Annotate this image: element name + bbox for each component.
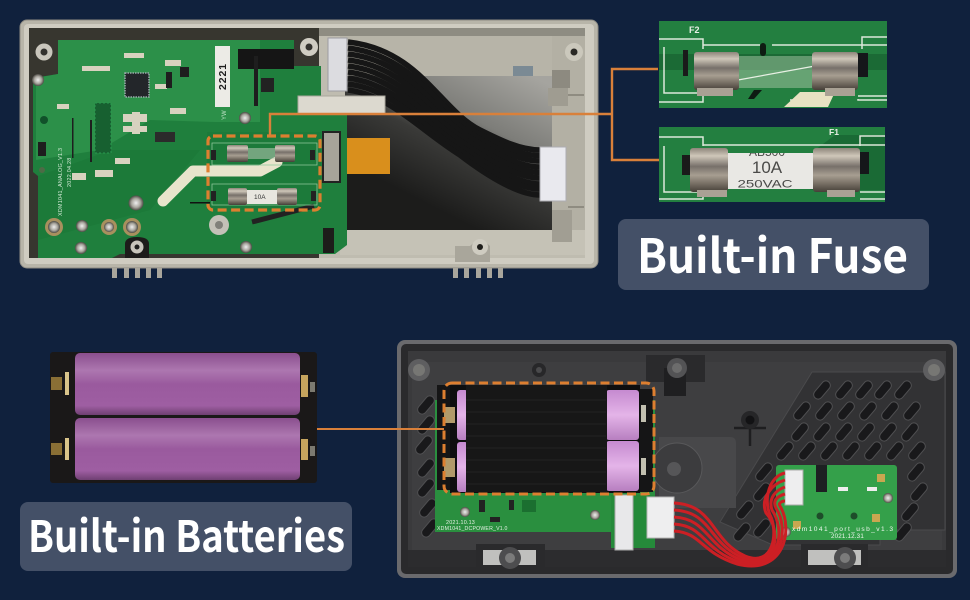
white connectors xyxy=(328,38,347,91)
heading: Built-in Batteries: Built-in Batteries xyxy=(28,502,345,565)
panel: fuse device photo: YW xyxy=(222,110,228,120)
black wrap tape xyxy=(466,385,607,492)
panel: fuse device photo: 2022.04.28 xyxy=(67,158,73,187)
panel: fuse device photo: 2221 xyxy=(217,63,229,90)
lower cell xyxy=(75,418,300,480)
upper cell xyxy=(75,353,300,415)
arrow: leader from fuses to detail photos xyxy=(270,69,659,160)
white connector xyxy=(615,495,633,550)
small SMD components xyxy=(57,53,186,180)
panel: fuse device photo xyxy=(20,20,598,278)
battery holder xyxy=(437,385,459,490)
white trace xyxy=(163,162,277,201)
battery contacts xyxy=(51,377,62,390)
bottom post xyxy=(125,237,149,258)
fuse F2 mini xyxy=(211,143,317,165)
orange flex cable xyxy=(345,138,390,174)
mounted screws xyxy=(32,74,44,86)
green PCB xyxy=(33,40,347,258)
PCB secondary board xyxy=(207,132,321,210)
panel: fuse F1 detail photo: 10A xyxy=(752,158,783,177)
battery pack xyxy=(450,385,640,493)
corner posts xyxy=(408,359,430,381)
power PCB xyxy=(435,400,655,532)
panel: battery device photo: XDM1041_DCPOWER_V1.0 xyxy=(437,526,508,532)
arrow: leader from batteries to device xyxy=(317,428,444,430)
panel: battery device photo xyxy=(397,340,957,578)
panel: fuse F1 detail photo xyxy=(659,127,885,202)
black slots xyxy=(190,202,210,204)
panel: battery device photo: 2021.12.31 xyxy=(831,533,864,540)
panel: fuse F2 detail photo: F2 xyxy=(689,25,700,35)
vent holes xyxy=(732,379,929,543)
latches xyxy=(548,88,568,106)
mesh vent plate xyxy=(720,372,945,545)
panel: battery pack photo xyxy=(50,352,317,483)
black connector block xyxy=(238,49,294,69)
casing xyxy=(397,340,957,578)
corner posts xyxy=(36,44,52,60)
panel: battery device photo: 2021.10.13 xyxy=(446,520,475,526)
board silkscreen: XDM1041_ANALOG_V1.3 xyxy=(58,148,64,216)
flex connector xyxy=(323,132,340,182)
callout: fuse dashed highlight xyxy=(208,136,320,210)
bottom post xyxy=(455,241,490,262)
USB board xyxy=(776,465,897,540)
callout: battery dashed highlight xyxy=(444,383,654,494)
left vents xyxy=(414,394,440,539)
red cable xyxy=(674,473,786,566)
panel: fuse F2 detail photo xyxy=(659,21,887,108)
tray interior xyxy=(29,28,585,258)
display panel xyxy=(345,76,552,230)
raised round boss xyxy=(659,437,736,508)
device outer casing xyxy=(20,20,598,268)
panel: fuse F1 detail photo: F1 xyxy=(829,127,839,137)
panel: fuse F1 detail photo: AB500 xyxy=(749,145,785,159)
vents pattern xyxy=(95,103,111,153)
fuse F1 mini xyxy=(211,184,317,205)
main IC xyxy=(125,73,149,97)
battery terminals xyxy=(444,407,455,423)
bottom feet xyxy=(476,544,868,570)
panel: battery device photo: xdm1041_port_usb_v1.3 xyxy=(792,526,893,533)
cross post xyxy=(734,412,766,446)
fuse F1 mini: 10A xyxy=(254,194,266,201)
panel: fuse F1 detail photo: 250VAC xyxy=(738,178,793,190)
bottom pins xyxy=(112,268,503,278)
wire bundle xyxy=(348,42,540,195)
label 2221 xyxy=(215,46,230,107)
white ribbon cable xyxy=(298,96,385,114)
heading: Built-in Fuse: Built-in Fuse xyxy=(637,218,908,287)
